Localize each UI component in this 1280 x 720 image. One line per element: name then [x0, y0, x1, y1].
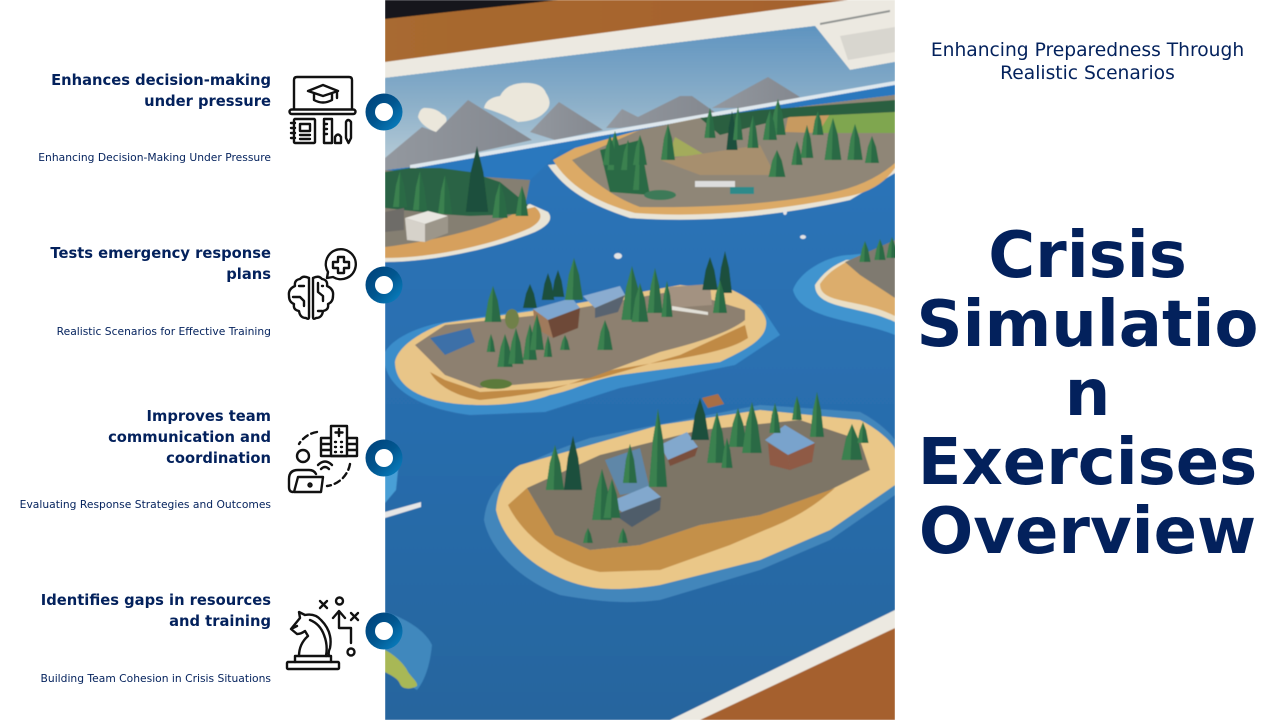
- list item 4: [41, 592, 271, 685]
- heading: communication and: [108, 429, 271, 446]
- description: Realistic Scenarios for Effective Training: [57, 325, 271, 338]
- paper border and wood bottom right: [670, 610, 895, 720]
- wood table top: [385, 0, 895, 70]
- heading: coordination: [166, 450, 271, 467]
- list item 2: [50, 245, 271, 338]
- marker 1: [366, 94, 402, 130]
- horizon line: [410, 81, 895, 169]
- heading: [41, 592, 271, 630]
- title: Exercises: [918, 426, 1257, 500]
- description: Evaluating Response Strategies and Outcomes: [20, 498, 271, 511]
- marker 4: [366, 612, 402, 650]
- icon: laptop with graduation cap and stationery: [290, 77, 356, 143]
- list item 1: [38, 72, 271, 164]
- heading: and training: [169, 613, 271, 630]
- island: right edge: [793, 237, 898, 335]
- title: Crisis: [988, 219, 1187, 293]
- subtitle: Realistic Scenarios: [1000, 63, 1175, 84]
- island: upper right: [548, 95, 895, 220]
- list item 3: [20, 408, 271, 511]
- subtitle: Enhancing Preparedness Through: [931, 40, 1244, 61]
- heading: under pressure: [144, 93, 271, 110]
- description: Enhancing Decision-Making Under Pressure: [38, 151, 271, 164]
- heading: Enhances decision-making: [51, 72, 271, 89]
- mountains: [385, 77, 800, 170]
- icon: remote worker with hospital: [289, 426, 357, 492]
- sky: [385, 26, 895, 170]
- island: upper left: [385, 146, 550, 262]
- clouds: [418, 83, 550, 133]
- heading: Identifies gaps in resources: [41, 592, 271, 609]
- central photo: island map model: [385, 0, 895, 720]
- heading: [51, 72, 271, 110]
- icon: chess knight with strategy marks: [287, 598, 358, 669]
- island: centre: [385, 251, 780, 415]
- heading: [50, 245, 271, 283]
- heading: Improves team: [147, 408, 271, 425]
- boats: [614, 209, 806, 259]
- icon: brain with medical cross bubble: [289, 249, 356, 319]
- marker 3: [366, 440, 402, 476]
- title: Overview: [919, 495, 1256, 569]
- heading: [108, 408, 271, 467]
- island: lower: [484, 392, 895, 602]
- description: Building Team Cohesion in Crisis Situations: [41, 672, 271, 685]
- title: [917, 219, 1258, 569]
- marker 2: [366, 266, 402, 304]
- subtitle: [931, 40, 1244, 84]
- heading: Tests emergency response: [50, 245, 271, 262]
- heading: plans: [226, 266, 271, 283]
- map fragments lower left: [385, 455, 432, 690]
- water: [385, 0, 895, 720]
- paper border top: [385, 0, 895, 78]
- title: n: [1065, 357, 1110, 431]
- title: Simulatio: [917, 288, 1258, 362]
